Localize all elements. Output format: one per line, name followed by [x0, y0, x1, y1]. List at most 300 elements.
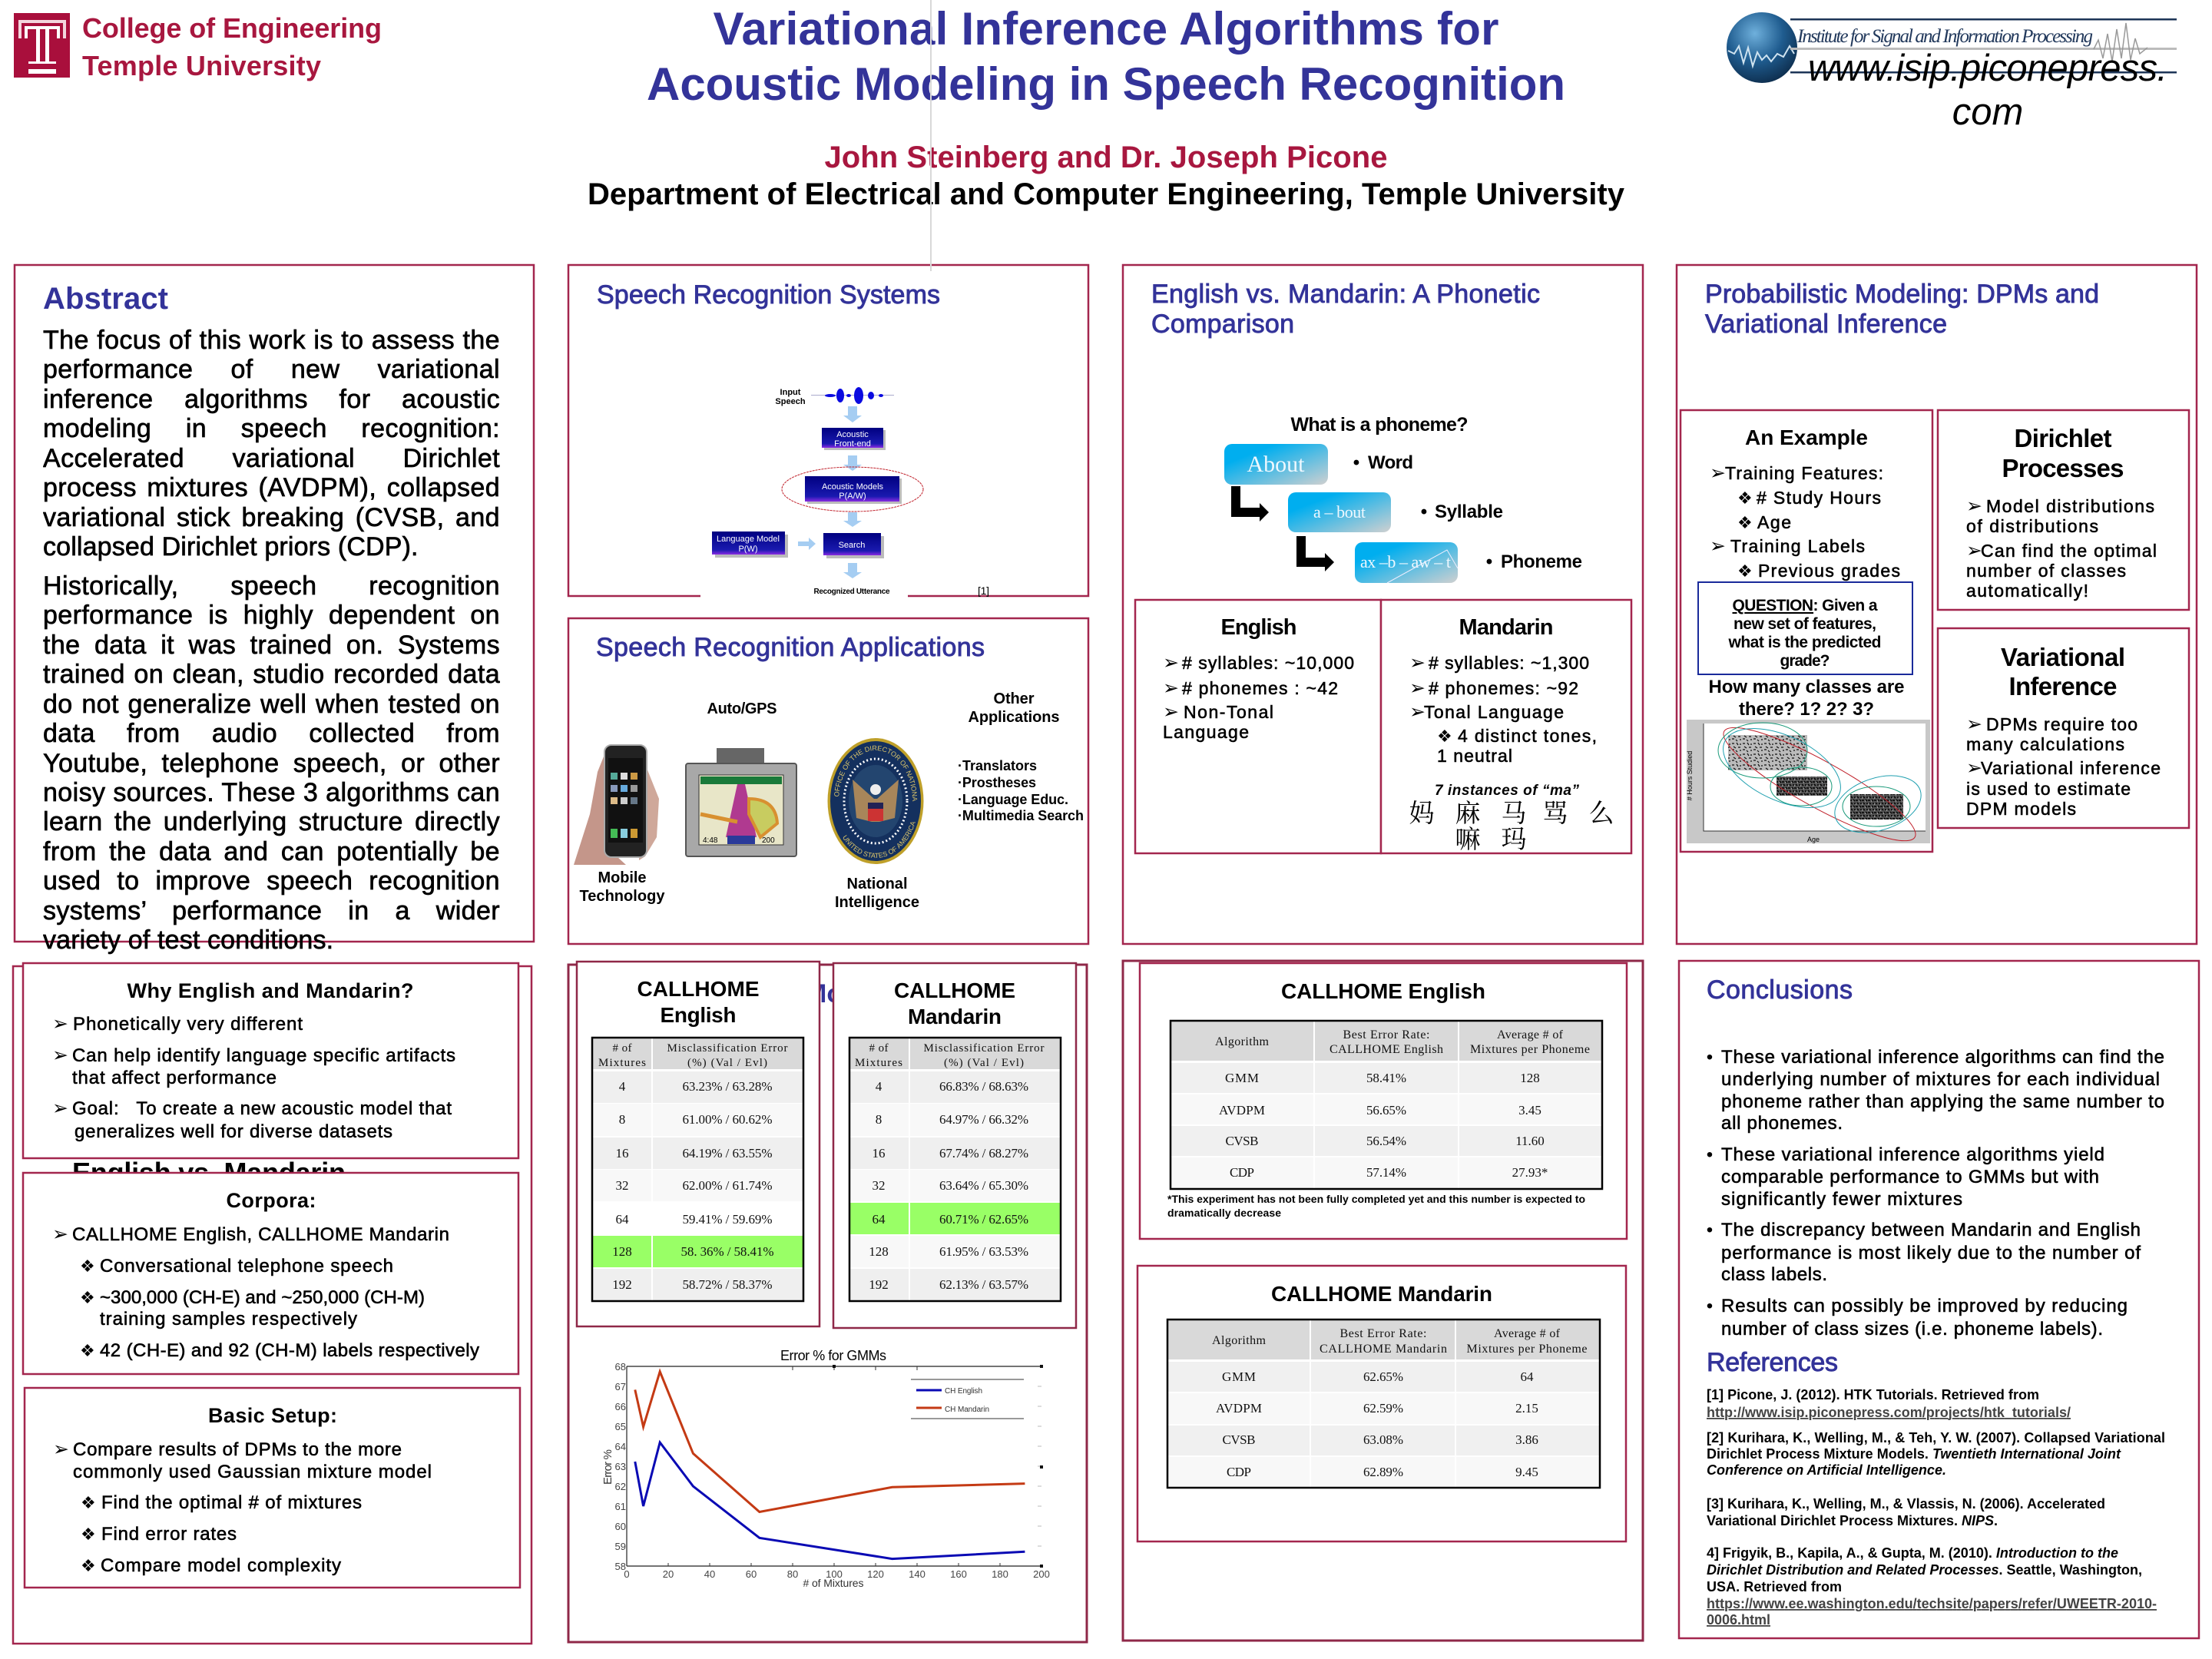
box: mandarin [1381, 600, 1631, 854]
table: 2.15 [1515, 1401, 1538, 1416]
line chart: error % for GMMs: 60 [615, 1521, 626, 1532]
box: an example: How many classes are [1708, 677, 1905, 697]
phoneme hierarchy diagram: About [1247, 452, 1305, 477]
label: mobile technology [579, 869, 665, 905]
box: english: # phonemes : ~42 [1182, 678, 1338, 698]
box: variational inference: Variational [2001, 643, 2125, 671]
panel: GMM experiments [568, 962, 1087, 1642]
conclusions bullet list: significantly fewer mixtures [1721, 1189, 1962, 1210]
table [1171, 1021, 1602, 1189]
box: dirichlet processes: Can find the optimal [1981, 541, 2157, 561]
table: 8 [619, 1112, 625, 1127]
heading [1705, 280, 2099, 339]
line chart: error % for GMMs [601, 1348, 1050, 1589]
line chart: error % for GMMs: Error % for GMMs [780, 1348, 886, 1363]
box: variational inference: DPM models [1966, 799, 2076, 819]
reference list: [2] Kurihara, K., Welling, M., & Teh, Y. W. (2007). Collapsed Variational [1707, 1430, 2165, 1445]
line chart: error % for GMMs: 80 [787, 1568, 798, 1580]
box: callhome mandarin table: Mandarin [908, 1005, 1002, 1028]
heading [1151, 280, 1540, 339]
table: GMM [1222, 1369, 1256, 1384]
conclusions bullet list: The discrepancy between Mandarin and English [1721, 1220, 2141, 1240]
box: variational inference [1938, 628, 2189, 828]
abstract body text: variety of test conditions. [43, 926, 333, 955]
abstract body text: from the data and can potentially be [43, 837, 500, 866]
box: corpora: training samples respectively [100, 1309, 357, 1330]
table: 27.93* [1512, 1165, 1548, 1180]
label: national intelligence: Intelligence [835, 894, 919, 911]
box: corpora: ~300,000 (CH-E) and ~250,000 (CH-M) [100, 1287, 425, 1308]
box: english: Language [1163, 722, 1249, 742]
box: dirichlet processes: number of classes [1966, 561, 2126, 581]
table: 8 [876, 1112, 882, 1127]
table: Misclassification Error [923, 1042, 1045, 1055]
heading: Speech Recognition Systems [597, 280, 940, 310]
box: an example: Previous grades [1758, 561, 1900, 581]
panel: DPM results [1123, 961, 1643, 1641]
department: Department of Electrical and Computer Engineering, Temple University [588, 177, 1625, 211]
icon: phone in hand [574, 745, 659, 865]
legend: CH Mandarin [945, 1406, 989, 1414]
box: callhome mandarin table [833, 963, 1076, 1328]
table: 64.19% / 63.55% [682, 1146, 773, 1161]
table: CALLHOME English [1330, 1043, 1443, 1056]
flow diagram: Search [839, 541, 865, 550]
table: 62.00% / 61.74% [682, 1178, 773, 1193]
scatter plot [1686, 711, 1930, 857]
box: corpora: CALLHOME English, CALLHOME Mandarin [72, 1224, 449, 1245]
box: mandarin: 4 distinct tones, [1458, 726, 1597, 746]
box: an example: Training Labels [1730, 536, 1865, 556]
table: CDP [1230, 1165, 1254, 1180]
abstract body text: systems’ performance in a wider [43, 896, 500, 926]
conclusions bullet list: • [1707, 1144, 1713, 1165]
reference list: Conference on Artificial Intelligence. [1707, 1462, 1946, 1478]
clipped heading fragment: Mo [805, 979, 843, 1008]
box: mandarin: 骂 [1542, 800, 1568, 828]
box: callhome english table: English [661, 1003, 736, 1027]
panel: conclusions and references [1679, 961, 2199, 1638]
box: why english and mandarin: Phonetically very different [73, 1014, 303, 1035]
abstract body text: Youtube, telephone speech, or other [43, 749, 500, 778]
callout: question: what is the predicted [1728, 634, 1882, 651]
abstract body text: used to improve speech recognition [43, 866, 500, 896]
table: AVDPM [1216, 1401, 1262, 1416]
table: 56.65% [1366, 1103, 1406, 1118]
flow diagram: Front-end [834, 439, 871, 449]
footnote: *This experiment has not been fully completed yet and this number is expected to [1167, 1193, 1585, 1205]
label: mobile technology: Mobile [598, 869, 647, 886]
box: mandarin: ➢ [1409, 700, 1426, 723]
box: mandarin: Tonal Language [1424, 702, 1564, 722]
reference list: Dirichlet Distribution and Related Processes. Seattle, Washington, [1707, 1562, 2142, 1578]
label: national intelligence [835, 876, 919, 911]
table: Mixtures per Phoneme [1470, 1043, 1590, 1056]
panel: probabilistic modeling [1677, 265, 2197, 944]
icon: GPS device [686, 748, 796, 856]
conclusions bullet list: number of class sizes (i.e. phoneme labels). [1721, 1319, 2103, 1339]
line chart: error % for GMMs: 40 [704, 1568, 715, 1580]
box: variational inference: Variational inference [1981, 758, 2161, 778]
footnote [1167, 1193, 1585, 1219]
phoneme hierarchy diagram: a – bout [1313, 502, 1366, 522]
box: why english and mandarin: that affect performance [72, 1068, 276, 1088]
abstract body text: Historically, speech recognition [43, 571, 500, 601]
box: english: English [1221, 615, 1296, 640]
box: why english and mandarin: Why English and Mandarin? [127, 979, 413, 1002]
reference list: [3] Kurihara, K., Welling, M., & Vlassis, N. (2006). Accelerated [1707, 1496, 2105, 1512]
line chart: error % for GMMs: 20 [663, 1568, 674, 1580]
table: 60.71% / 62.65% [939, 1212, 1028, 1227]
table: CDP [1227, 1465, 1251, 1479]
other applications list: ·Language Educ. [958, 792, 1068, 807]
other applications list [958, 690, 1084, 823]
table: 62.89% [1363, 1465, 1403, 1479]
box: corpora: ➢ [52, 1223, 68, 1245]
abstract body text: The focus of this work is to assess the [43, 326, 500, 355]
abstract body text: data from audio collected from [43, 719, 500, 748]
abstract body text: performance is highly dependent on [43, 601, 500, 630]
callout: question: new set of features, [1734, 615, 1876, 633]
box: variational inference: Inference [2009, 672, 2117, 700]
box: mandarin: 1 neutral [1437, 746, 1512, 766]
phoneme hierarchy diagram: What is a phoneme? [1290, 414, 1469, 435]
table: 32 [616, 1178, 628, 1193]
reference list: http://www.isip.piconepress.com/projects/htk_tutorials/ [1707, 1405, 2071, 1420]
flow diagram: Language Model [717, 535, 780, 544]
panel: speech recognition applications [567, 618, 1089, 945]
table: AVDPM [1219, 1103, 1265, 1118]
box: basic setup: Basic Setup: [208, 1404, 337, 1427]
other applications list: ·Prostheses [958, 775, 1036, 790]
box: an example: ❖ [1737, 514, 1753, 533]
table: GMM [1225, 1071, 1259, 1085]
table: Mixtures [855, 1057, 902, 1069]
box: mandarin: # phonemes: ~92 [1429, 678, 1578, 698]
conclusions bullet list: all phonemes. [1721, 1113, 1843, 1134]
college name [82, 12, 382, 81]
flow diagram: Recognized Utterance [814, 588, 890, 596]
heading: abstract: Abstract [43, 282, 168, 316]
box: why english and mandarin: Can help identify language specific artifacts [72, 1045, 455, 1066]
reference list [1707, 1387, 2165, 1628]
table: 192 [869, 1277, 889, 1292]
line chart: error % for GMMs: 120 [867, 1568, 884, 1580]
icon: GPS device: 4:48 [703, 836, 718, 845]
box: mandarin: 么 [1588, 800, 1614, 828]
line chart: error % for GMMs: 100 [826, 1568, 843, 1580]
table: Algorithm [1212, 1334, 1267, 1347]
table: 56.54% [1366, 1134, 1406, 1148]
icon: national intelligence seal [828, 738, 923, 864]
box: basic setup: ❖ [81, 1557, 96, 1576]
box: basic setup [25, 1388, 520, 1588]
box: english: # syllables: ~10,000 [1182, 653, 1354, 673]
phoneme hierarchy diagram: Word [1368, 452, 1413, 473]
box: why english and mandarin: Goal: To create a new acoustic model that [72, 1098, 452, 1119]
box: corpora: Corpora: [226, 1189, 316, 1212]
table: 61.00% / 60.62% [682, 1112, 773, 1127]
flow diagram: Input [780, 388, 801, 397]
table: Average # of [1497, 1028, 1564, 1041]
line chart: error % for GMMs: 58 [615, 1561, 626, 1572]
box: variational inference: ➢ [1966, 713, 1982, 735]
table: 3.86 [1515, 1432, 1538, 1447]
reference list: Dirichlet Process Mixture Models. Twentieth International Joint [1707, 1446, 2121, 1462]
reference list: https://www.ee.washington.edu/techsite/papers/refer/UWEETR-2010- [1707, 1596, 2157, 1611]
label: national intelligence: National [846, 876, 908, 892]
box: mandarin: 玛 [1501, 826, 1527, 854]
phoneme hierarchy diagram [1224, 414, 1582, 583]
box: mandarin: # syllables: ~1,300 [1429, 653, 1589, 673]
conclusions bullet list: • [1707, 1296, 1713, 1316]
line chart: error % for GMMs: 59 [615, 1541, 626, 1552]
table: 63.08% [1363, 1432, 1403, 1447]
flow diagram [700, 387, 989, 598]
box: basic setup: Find the optimal # of mixtures [101, 1492, 362, 1513]
abstract body text: inference algorithms for acoustic [43, 385, 500, 414]
box: an example: ❖ [1737, 562, 1753, 581]
box: dirichlet processes: Model distributions [1986, 496, 2154, 516]
panel: data and setup [13, 963, 531, 1644]
line chart: error % for GMMs: 180 [992, 1568, 1008, 1580]
table: (%) (Val / Evl) [944, 1057, 1024, 1069]
line chart: error % for GMMs: 0 [624, 1568, 630, 1580]
box: dirichlet processes: Dirichlet [2014, 424, 2112, 452]
other applications list: Applications [968, 709, 1060, 726]
other applications list: Other [994, 690, 1035, 707]
scatter plot: Age [1807, 836, 1820, 843]
phoneme hierarchy diagram: Phoneme [1501, 551, 1582, 572]
box: an example: An Example [1745, 426, 1868, 449]
panel: english vs mandarin phonetic comparison [1123, 265, 1643, 944]
box: an example: # Study Hours [1757, 488, 1881, 508]
table: Best Error Rate: [1339, 1327, 1427, 1340]
heading: conclusions: Conclusions [1707, 975, 1853, 1005]
phoneme hierarchy diagram: • [1353, 452, 1359, 473]
line chart: error % for GMMs: 200 [1033, 1568, 1050, 1580]
box: callhome english results: CALLHOME English [1281, 979, 1485, 1003]
table [1167, 1320, 1600, 1488]
table: 32 [873, 1178, 885, 1193]
box: corpora: Conversational telephone speech [100, 1256, 393, 1277]
box: corpora: ❖ [80, 1257, 95, 1277]
abstract body text: do not generalize well when tested on [43, 690, 500, 719]
abstract body text: Accelerated variational Dirichlet [43, 444, 500, 473]
box: mandarin: Mandarin [1459, 615, 1553, 640]
abstract body text: modeling in speech recognition: [43, 414, 500, 443]
box: dirichlet processes: of distributions [1966, 516, 2098, 536]
table [592, 1038, 803, 1301]
conclusions bullet list [1707, 1047, 2164, 1339]
table: 63.23% / 63.28% [682, 1079, 773, 1094]
box: an example [1681, 410, 1932, 857]
table: 64 [873, 1212, 886, 1227]
box: an example: ➢ [1710, 535, 1726, 557]
line chart: error % for GMMs: 65 [615, 1421, 626, 1432]
abstract body text: performance of new variational [43, 355, 500, 384]
table: 57.14% [1366, 1165, 1406, 1180]
table: 192 [612, 1277, 632, 1292]
table: 16 [873, 1146, 885, 1161]
line chart: error % for GMMs: 160 [950, 1568, 967, 1580]
box: english [1135, 600, 1381, 853]
box: mandarin: 妈 [1409, 800, 1435, 828]
line chart: error % for GMMs: # of Mixtures [803, 1577, 863, 1589]
box: variational inference: many calculations [1966, 734, 2124, 754]
icon: national intelligence seal: UNITED STATES OF AMERICA [843, 822, 916, 859]
title: Acoustic Modeling in Speech Recognition [647, 58, 1565, 110]
box: an example: ❖ [1737, 489, 1753, 508]
box: why english and mandarin: ➢ [52, 1012, 68, 1035]
icon: GPS device: 200 [762, 836, 775, 845]
footnote: dramatically decrease [1167, 1207, 1281, 1219]
callout: question: QUESTION: Given a [1733, 597, 1878, 614]
table: 62.59% [1363, 1401, 1403, 1416]
scatter plot: # Hours Studied [1686, 751, 1694, 800]
legend [911, 1379, 1024, 1419]
line chart: error % for GMMs: 62 [615, 1481, 626, 1492]
conclusions bullet list: These variational inference algorithms can find the [1721, 1047, 2164, 1068]
abstract body text: collapsed Dirichlet priors (CDP). [43, 532, 419, 561]
table: 62.13% / 63.57% [939, 1277, 1028, 1292]
box: basic setup: commonly used Gaussian mixture model [73, 1462, 432, 1482]
abstract body text: learn the underlying structure directly [43, 807, 500, 836]
table: CVSB [1226, 1134, 1258, 1148]
line chart: error % for GMMs: 67 [615, 1381, 626, 1392]
box: mandarin: 嘛 [1455, 826, 1481, 854]
table: Mixtures per Phoneme [1467, 1343, 1587, 1356]
table: Mixtures [598, 1057, 646, 1069]
conclusions bullet list: comparable performance to GMMs but with [1721, 1167, 2099, 1187]
line chart: error % for GMMs: 66 [615, 1401, 626, 1412]
box: an example: there? 1? 2? 3? [1739, 699, 1874, 720]
callout: question [1698, 582, 1912, 674]
table: 64 [1521, 1369, 1534, 1384]
heading: Variational Inference [1705, 310, 1947, 339]
box: english: Non-Tonal [1184, 702, 1273, 722]
logo: ISIP institute: www.isip.piconepress. [1808, 48, 2167, 89]
conclusions bullet list: • [1707, 1047, 1713, 1068]
table: 66.83% / 68.63% [939, 1079, 1028, 1094]
title [647, 3, 1565, 110]
flow diagram: P(A/W) [839, 492, 866, 501]
box: dirichlet processes [1938, 410, 2189, 610]
table: 62.65% [1363, 1369, 1403, 1384]
abstract body text: trained on clean, studio recorded data [43, 660, 500, 689]
flow diagram: P(W) [738, 545, 758, 554]
line chart: error % for GMMs: Error % [601, 1449, 614, 1485]
box: corpora: ❖ [80, 1342, 95, 1361]
box: mandarin: 麻 [1455, 800, 1481, 828]
logo: ISIP institute: com [1952, 91, 2023, 133]
box: mandarin: 7 instances of “ma” [1435, 783, 1579, 799]
conclusions bullet list: These variational inference algorithms yield [1721, 1144, 2104, 1165]
box: corpora [23, 1173, 518, 1374]
box: callhome english table [577, 962, 820, 1326]
conclusions bullet list: Results can possibly be improved by reducing [1721, 1296, 2128, 1316]
table: (%) (Val / Evl) [687, 1057, 767, 1069]
box: variational inference: DPMs require too [1986, 714, 2137, 734]
table: 58.72% / 58.37% [682, 1277, 773, 1292]
table: 11.60 [1515, 1134, 1545, 1148]
box: why english and mandarin: ➢ [52, 1044, 68, 1066]
box: basic setup: Compare results of DPMs to the more [73, 1439, 402, 1460]
table: 58.41% [1366, 1071, 1406, 1085]
box: dirichlet processes: Processes [2002, 454, 2124, 482]
table: 64 [616, 1212, 629, 1227]
abstract body text: the data it was trained on. Systems [43, 631, 500, 660]
line chart: error % for GMMs: 61 [615, 1501, 626, 1512]
phoneme hierarchy diagram: • [1421, 502, 1427, 522]
box: variational inference: is used to estimate [1966, 779, 2131, 799]
table: Average # of [1494, 1327, 1561, 1340]
flow diagram: Acoustic Models [822, 482, 884, 492]
table: CVSB [1223, 1432, 1255, 1447]
table: 3.45 [1518, 1103, 1541, 1118]
panel: abstract [15, 265, 534, 963]
table: 67.74% / 68.27% [939, 1146, 1028, 1161]
box: dirichlet processes: automatically! [1966, 581, 2088, 601]
box: mandarin: 马 [1501, 800, 1527, 828]
label: mobile technology: Technology [579, 888, 665, 905]
box: mandarin: ❖ [1437, 727, 1452, 747]
table: 16 [616, 1146, 628, 1161]
box: callhome mandarin results: CALLHOME Mandarin [1271, 1282, 1492, 1306]
line chart: error % for GMMs: 64 [615, 1441, 626, 1452]
label: auto/GPS: Auto/GPS [707, 700, 777, 717]
logo: Temple University T [14, 13, 70, 78]
box: basic setup: Find error rates [101, 1524, 237, 1545]
box: an example: ➢ [1710, 462, 1726, 484]
box: basic setup: Compare model complexity [101, 1555, 341, 1576]
phoneme hierarchy diagram: • [1486, 551, 1492, 572]
heading: references: References [1707, 1348, 1838, 1377]
box: english: ➢ [1163, 700, 1179, 723]
flow diagram: [1] [978, 584, 989, 597]
table: Misclassification Error [667, 1042, 788, 1055]
title: Variational Inference Algorithms for [713, 3, 1499, 55]
box: callhome mandarin table: CALLHOME [894, 979, 1015, 1002]
box: corpora: 42 (CH-E) and 92 (CH-M) labels respectively [100, 1340, 479, 1361]
conclusions bullet list: • [1707, 1220, 1713, 1240]
box: variational inference: ➢ [1966, 757, 1982, 779]
conclusions bullet list: performance is most likely due to the number of [1721, 1243, 2141, 1263]
table: 61.95% / 63.53% [939, 1244, 1028, 1259]
table: 63.64% / 65.30% [939, 1178, 1028, 1193]
logo: ISIP institute [1727, 12, 2177, 133]
box: dirichlet processes: ➢ [1966, 539, 1982, 561]
other applications list: ·Multimedia Search [958, 808, 1084, 823]
box: callhome mandarin results [1137, 1266, 1626, 1541]
icon: national intelligence seal: OFFICE OF THE DIRECTOR OF NATIONAL INTELLIGENCE [834, 745, 917, 802]
phoneme hierarchy diagram: Syllable [1435, 502, 1503, 522]
logo: ISIP institute: Institute for Signal and Information Processing [1796, 26, 2093, 47]
flow diagram: Speech [775, 397, 806, 406]
heading: Probabilistic Modeling: DPMs and [1705, 280, 2099, 309]
heading: English vs. Mandarin: A Phonetic [1151, 280, 1540, 309]
reference list: USA. Retrieved from [1707, 1579, 1842, 1594]
box: mandarin: ➢ [1409, 651, 1426, 674]
table: 128 [612, 1244, 632, 1259]
box: english: ➢ [1163, 651, 1179, 674]
callout: question: grade? [1780, 652, 1830, 670]
box: basic setup: ❖ [81, 1525, 96, 1545]
reference list: [1] Picone, J. (2012). HTK Tutorials. Retrieved from [1707, 1387, 2039, 1402]
line chart: error % for GMMs: 68 [615, 1361, 626, 1373]
table: # of [869, 1042, 888, 1055]
legend: CH English [945, 1387, 982, 1396]
